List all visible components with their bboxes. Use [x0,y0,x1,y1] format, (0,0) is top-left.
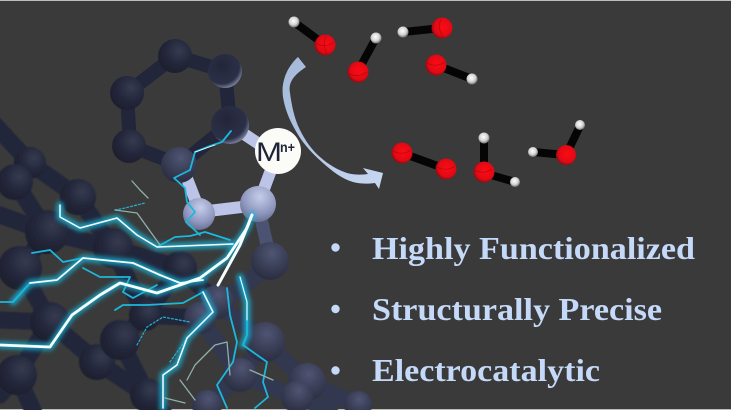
lightning cyan branches [0,131,268,408]
metal ion label [255,128,301,174]
bullet list [331,230,695,388]
metal ion label: n+ [280,139,295,155]
metal ion label: M [256,137,282,167]
bullet: structurally precise: Structurally Precise [372,291,662,327]
bullet: electrocatalytic: Electrocatalytic [372,352,600,388]
lightning pale branches [115,181,273,403]
lightning white core [0,145,252,408]
curved arrow [283,57,383,189]
bullet: highly functionalized: Highly Functionalized [372,230,695,266]
water molecules [288,16,585,187]
lightning [0,131,273,408]
molecule: lower graphene network [0,125,372,410]
lightning glow [0,205,252,408]
ring atoms [110,39,249,183]
molecule: upper ring with metal centre [110,39,289,280]
